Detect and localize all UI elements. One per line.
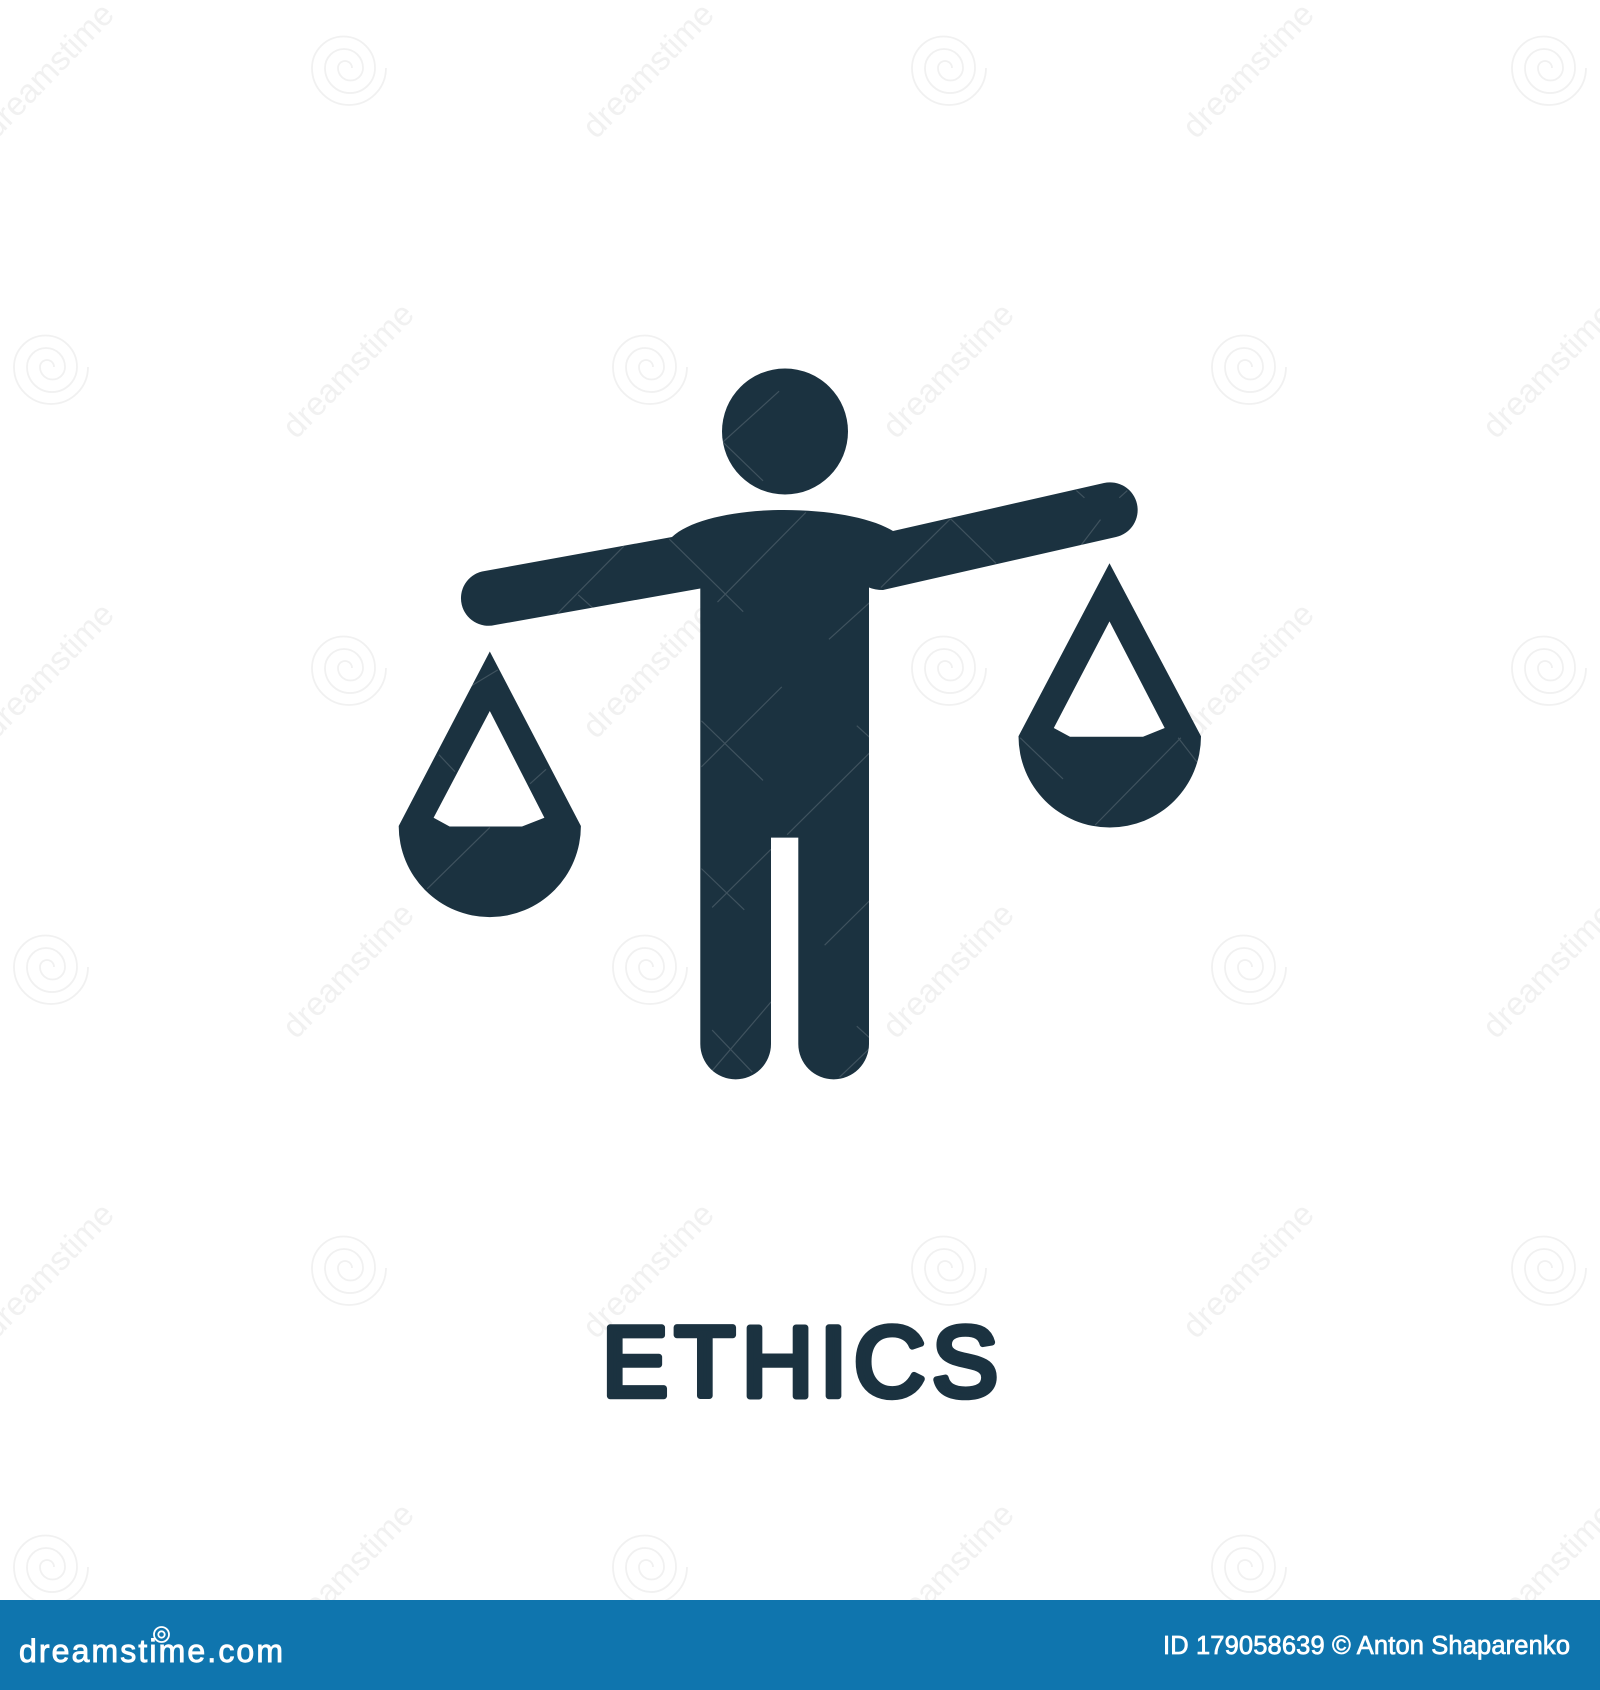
watermark lines over icon	[427, 391, 1197, 1077]
watermark pattern: dreamstime	[275, 895, 421, 1045]
logo text: dreamstime.com	[19, 1633, 283, 1669]
title: ETHICS	[602, 1306, 998, 1417]
icon: logo spiral	[154, 1627, 169, 1642]
icon: body with outstretched arms	[461, 482, 1138, 1079]
icon: right scale pan	[1018, 563, 1201, 828]
icon: head	[722, 368, 848, 494]
watermark pattern: dreamstime	[875, 895, 1021, 1045]
watermark pattern: dreamstime	[875, 295, 1021, 445]
footer banner	[0, 1600, 1600, 1690]
watermark pattern: dreamstime	[875, 1495, 1021, 1645]
icon: person balancing scales	[399, 368, 1201, 1079]
watermark pattern: dreamstime	[275, 295, 421, 445]
credit text: ID 179058639 © Anton Shaparenko	[1163, 1632, 1570, 1660]
icon: left scale pan	[399, 652, 581, 917]
watermark pattern: dreamstime	[1175, 595, 1321, 745]
watermark pattern: dreamstime	[575, 1195, 721, 1345]
watermark pattern: dreamstime	[1175, 1195, 1321, 1345]
watermark pattern: dreamstime	[575, 595, 721, 745]
watermark pattern: dreamstime	[275, 1495, 421, 1645]
